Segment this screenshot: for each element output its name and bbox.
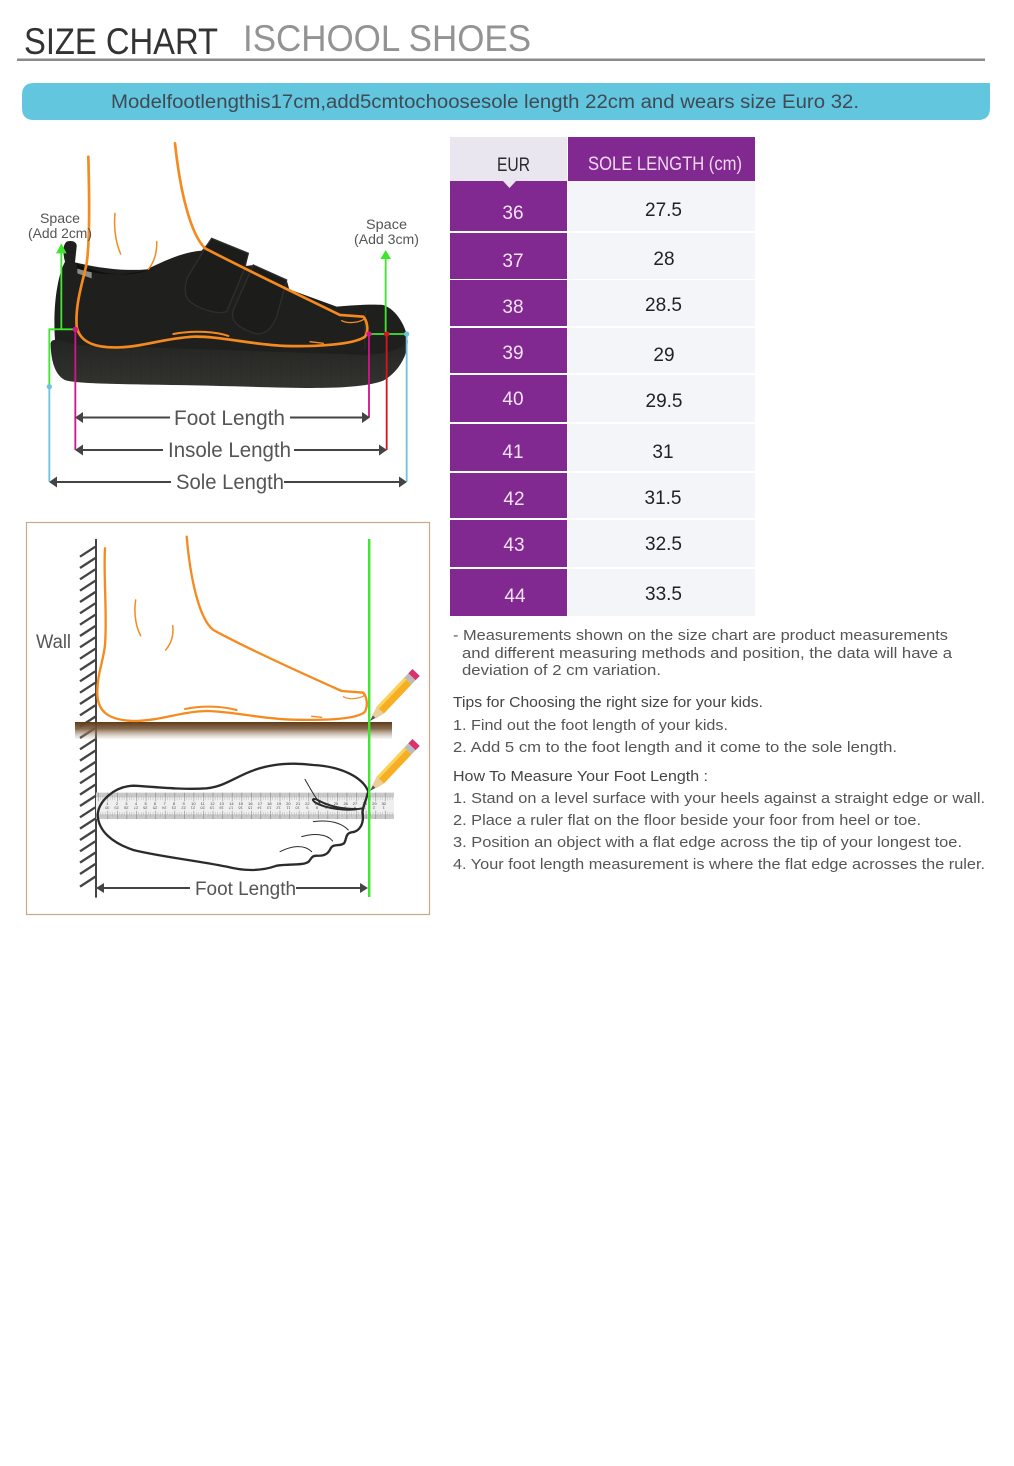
ruler (96, 793, 394, 819)
row 41: 31 (652, 442, 674, 463)
row 40: 40 (502, 389, 524, 410)
ruler: 8 (173, 801, 176, 806)
ruler: 8 (315, 806, 318, 811)
ruler: 19 (277, 801, 282, 806)
ruler: 27 (353, 801, 358, 806)
ruler: 5 (145, 801, 148, 806)
ruler: 10 (295, 806, 300, 811)
ruler: 4 (135, 801, 138, 806)
ruler: 4 (353, 806, 356, 811)
arrow: sole length (49, 471, 407, 494)
label: space add 3cm: Space (366, 217, 407, 232)
row 39 (450, 328, 755, 373)
ruler: 7 (164, 801, 167, 806)
shoe photo (51, 238, 408, 388)
arrow: insole length (75, 439, 387, 462)
text block: how to measure foot length (453, 768, 985, 873)
text block: tips for choosing size (453, 694, 897, 756)
ruler: 2 (116, 801, 119, 806)
ruler: 20 (286, 801, 291, 806)
text block: measurement note: - Measurements shown on the size chart are product measurements (453, 627, 948, 644)
title underline (17, 58, 985, 61)
label: space add 3cm: (Add 3cm) (354, 232, 419, 247)
row 37: 37 (502, 251, 524, 272)
foot top view outline (98, 764, 368, 870)
label: space add 2cm: (Add 2cm) (28, 226, 92, 241)
ruler: 24 (161, 806, 167, 811)
row 41: 41 (502, 442, 524, 463)
row 43 (450, 520, 755, 567)
ruler: 18 (267, 801, 272, 806)
ruler: 9 (305, 806, 308, 811)
ruler: 25 (152, 806, 157, 811)
row 36: 36 (502, 203, 524, 224)
ruler: 26 (142, 806, 148, 811)
row 42: 31.5 (645, 488, 681, 509)
text block: tips for choosing size: 1. Find out the foot length of your kids. (453, 717, 728, 734)
ruler: 28 (123, 806, 129, 811)
row 36 (450, 181, 755, 231)
row 44: 33.5 (645, 584, 682, 605)
floor (75, 722, 392, 739)
text block: measurement note: deviation of 2 cm variation. (462, 662, 661, 679)
label: space add 2cm: Space (40, 211, 80, 226)
arrow: sole length: Sole Length (176, 471, 284, 494)
measuring line (368, 539, 370, 897)
banner: model foot length note: Modelfootlengthis17cm,add5cmtochoosesole length 22cm and wears size Euro 32. (111, 92, 859, 113)
label: space add 2cm (28, 211, 92, 241)
arrow: foot length (96, 879, 368, 900)
ruler: 12 (210, 801, 215, 806)
ruler: 23 (171, 806, 176, 811)
ruler: 16 (238, 806, 243, 811)
ruler: 23 (315, 801, 320, 806)
ruler: 11 (285, 806, 290, 811)
text block: how to measure foot length: 1. Stand on a level surface with your heels against a straight edge or wall. (453, 790, 985, 807)
ruler: 1 (382, 806, 385, 811)
row 42: 42 (503, 489, 525, 510)
row 39: 29 (653, 345, 675, 366)
ruler: 13 (219, 801, 225, 806)
text block: tips for choosing size: Tips for Choosing the right size for your kids. (453, 694, 763, 711)
ruler: 14 (257, 806, 262, 811)
ruler: 5 (343, 806, 346, 811)
ruler: 17 (228, 806, 233, 811)
icon: pencil upper (366, 669, 420, 724)
row 38: 38 (502, 297, 524, 318)
row 37: 28 (653, 249, 675, 270)
row 43: 43 (503, 535, 525, 556)
ruler: 16 (248, 801, 253, 806)
ruler: 18 (219, 806, 224, 811)
foot side view (97, 537, 367, 721)
panel: how to measure foot (26, 522, 430, 914)
table header (450, 137, 755, 181)
ruler: 22 (181, 806, 186, 811)
ruler: 25 (334, 801, 339, 806)
arrow: foot length: Foot Length (195, 879, 296, 900)
label: space add 3cm (354, 217, 419, 247)
ruler: 30 (381, 801, 387, 806)
ruler: 20 (200, 806, 205, 811)
row 38 (450, 280, 755, 326)
text block: how to measure foot length: 2. Place a ruler flat on the floor beside your foor from heel or toe. (453, 812, 921, 829)
row 39: 39 (502, 343, 524, 364)
arrow: foot length (75, 407, 370, 430)
table: EUR to sole length (450, 137, 755, 616)
row 43: 32.5 (645, 534, 682, 555)
panel: shoe diagram with measurements (28, 143, 419, 494)
ruler: 26 (343, 801, 349, 806)
ruler: 13 (266, 806, 272, 811)
ruler: 19 (209, 806, 214, 811)
row 40: 29.5 (646, 391, 682, 412)
wall with hatching (80, 539, 96, 898)
row 42 (450, 473, 755, 518)
measurement guide lines (47, 243, 409, 482)
text block: measurement note (453, 627, 953, 679)
row 41 (450, 424, 755, 471)
foot outline (76, 143, 367, 347)
subtitle: iSchool shoes: ISCHOOL SHOES (243, 18, 531, 59)
ruler: 11 (201, 801, 206, 806)
ruler: 6 (154, 801, 157, 806)
ruler: 10 (191, 801, 196, 806)
banner: model foot length note (22, 83, 990, 120)
arrow: insole length: Insole Length (168, 439, 291, 462)
ruler: 3 (363, 806, 366, 811)
text block: how to measure foot length: How To Measure Your Foot Length : (453, 768, 708, 785)
ruler: 28 (362, 801, 368, 806)
ruler: 15 (247, 806, 253, 811)
title: size chart: SIZE CHART (24, 21, 218, 62)
ruler: 29 (372, 801, 377, 806)
ruler: 1 (106, 801, 109, 806)
text block: how to measure foot length: 3. Position an object with a flat edge across the tip of your longest toe. (453, 834, 962, 851)
row 36: 27.5 (645, 200, 682, 221)
text block: how to measure foot length: 4. Your foot length measurement is where the flat edge acrosses the ruler. (453, 856, 985, 873)
ruler: 14 (229, 801, 234, 806)
ruler: 30 (104, 806, 110, 811)
ruler: 7 (324, 806, 327, 811)
table header: EUR (497, 155, 530, 176)
row 44 (450, 569, 755, 616)
ruler: 21 (190, 806, 195, 811)
ruler: 15 (238, 801, 244, 806)
ruler: 17 (258, 801, 263, 806)
ruler: 27 (133, 806, 138, 811)
ruler: 9 (183, 801, 186, 806)
ruler: 22 (305, 801, 310, 806)
ruler: 2 (372, 806, 375, 811)
ruler: 6 (334, 806, 337, 811)
ruler: 24 (324, 801, 330, 806)
table header: SOLE LENGTH (cm) (588, 154, 742, 175)
row 38: 28.5 (645, 295, 682, 316)
panel frame (26, 522, 430, 914)
text block: tips for choosing size: 2. Add 5 cm to the foot length and it come to the sole length. (453, 739, 897, 756)
row 44: 44 (504, 586, 526, 607)
ruler: 12 (276, 806, 281, 811)
ruler: 3 (125, 801, 128, 806)
ruler: 29 (114, 806, 119, 811)
ruler: 21 (296, 801, 301, 806)
row 37 (450, 233, 755, 279)
icon: pencil lower (366, 739, 420, 794)
arrow: foot length: Foot Length (174, 407, 285, 430)
label: wall: Wall (36, 632, 71, 653)
text block: measurement note: and different measuring methods and position, the data will have a (462, 645, 953, 662)
row 40 (450, 375, 755, 422)
